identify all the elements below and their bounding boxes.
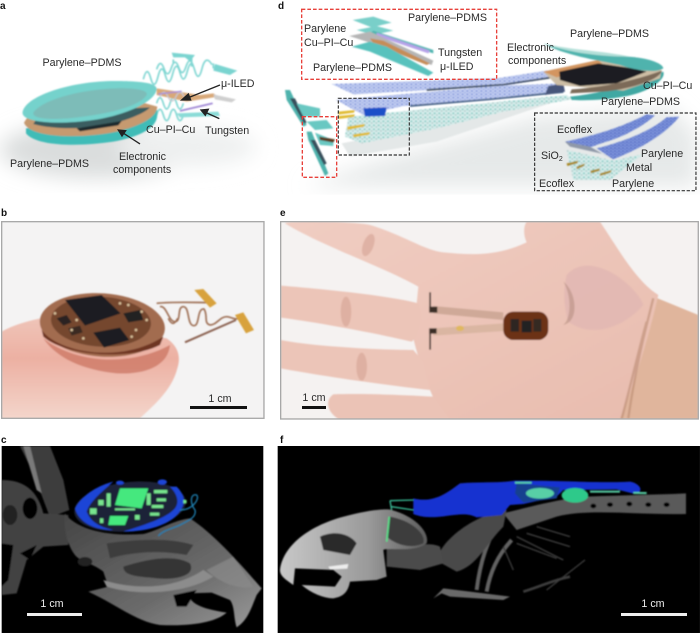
bottom teal layer [26, 110, 157, 145]
scale bar: panel c [27, 598, 82, 616]
labels: panel d: Electronic [507, 42, 555, 54]
skull [280, 509, 427, 598]
device: blue encapsulation [413, 481, 640, 517]
chips [65, 295, 121, 326]
panel d: exploded view of back device [270, 0, 700, 211]
labels: panel d: Parylene–PDMS [408, 12, 487, 24]
middle finger [281, 286, 421, 342]
neck [387, 543, 443, 570]
black dashed box: left section [338, 98, 409, 155]
panel letter a: a [0, 1, 6, 12]
background shadow [303, 107, 697, 187]
scale bar: panel f [621, 598, 687, 616]
labels: panel d: components [508, 55, 566, 67]
panel a: exploded view of head device [0, 50, 267, 203]
panel letter f: f [280, 435, 284, 446]
labels: panel d: Ecoflex [539, 178, 575, 190]
palm shading [564, 266, 643, 330]
labels: panel d [304, 12, 692, 190]
device disc [39, 292, 166, 358]
copper layer [24, 100, 157, 136]
scale bar: panel b [190, 393, 247, 409]
top teal disc [23, 81, 157, 123]
scale bar: panel c: 1 cm [40, 598, 64, 610]
left stack [285, 90, 307, 127]
panel b: photo of device on fingertip [2, 222, 264, 420]
labels: panel a: Parylene–PDMS [42, 57, 122, 69]
panel letter b: b [1, 208, 7, 219]
flexible strips [342, 97, 570, 157]
head section [570, 72, 664, 100]
labels: panel d: Parylene [304, 23, 346, 35]
ribbons [433, 306, 503, 320]
scale bar: panel f: 1 cm [641, 598, 665, 610]
labels: panel d: 2 [559, 156, 563, 163]
scale bar: panel b: 1 cm [208, 393, 232, 405]
electrodes [429, 292, 437, 350]
labels: panel d: Cu–PI–Cu [304, 37, 353, 49]
red dashed box: inset [302, 9, 497, 79]
ribs and scapula [477, 513, 512, 592]
black dashed box: detail inset [535, 113, 696, 191]
skull [65, 513, 262, 627]
labels: panel a: Tungsten [205, 125, 249, 137]
copper traces [157, 88, 218, 102]
scale bar: panel e [302, 392, 326, 409]
labels: panel d: SiO [541, 150, 559, 162]
spine [503, 493, 686, 530]
probe [185, 320, 236, 342]
scale bar: panel e: 1 cm [302, 392, 326, 404]
labels: panel a: Cu–PI–Cu [146, 124, 195, 136]
labels: panel a: components [113, 164, 171, 176]
panel letter c: c [1, 435, 7, 446]
labels: panel d: μ-ILED [440, 61, 474, 73]
device: circuit [515, 483, 560, 503]
labels: panel a: μ-ILED [221, 78, 255, 90]
foot and arm [433, 588, 510, 600]
neck vertebrae [2, 480, 68, 595]
panel e: photo of device on palm [281, 222, 698, 419]
serpentine wire [157, 302, 210, 303]
labels: panel d: Ecoflex [557, 124, 593, 136]
ring finger [281, 340, 430, 390]
panel letter e: e [280, 208, 286, 219]
tungsten probe [180, 103, 213, 111]
inset strips [565, 114, 655, 147]
panel letter d: d [278, 1, 284, 12]
arrow: to electronic components [118, 130, 140, 144]
red dashed box: left section [302, 117, 337, 177]
gold pads [194, 289, 217, 308]
device: blue encapsulation [74, 480, 186, 533]
device: probes [390, 500, 413, 510]
labels: panel d: Parylene–PDMS [570, 28, 649, 40]
palm and index finger [285, 222, 658, 419]
arrow: to μ-ILED [182, 85, 220, 100]
device: chips [115, 488, 148, 508]
labels: panel d: Parylene [641, 148, 683, 160]
labels: panel d: Tungsten [438, 47, 482, 59]
red inset stack [349, 17, 433, 76]
labels: panel d: Parylene–PDMS [601, 96, 680, 108]
labels: panel d: Parylene [612, 178, 654, 190]
labels: panel d: Cu–PI–Cu [643, 80, 692, 92]
labels: panel a: Electronic [119, 151, 167, 163]
serpentine upper layer [143, 58, 213, 121]
labels: panel d: Parylene–PDMS [313, 62, 392, 74]
little finger [328, 394, 450, 419]
labels: panel a: Parylene–PDMS [10, 158, 89, 170]
panel c: CT scan of skull with device [2, 446, 263, 633]
background shadow [0, 122, 257, 178]
labels: panel d: Metal [626, 162, 652, 174]
panel f: CT scan of body with device [278, 446, 700, 633]
shoulder blade [20, 446, 69, 517]
finger [2, 318, 179, 420]
gold LED tips [338, 110, 370, 137]
labels: panel a [10, 57, 255, 176]
wrist [620, 288, 698, 419]
arrow: to tungsten [201, 109, 219, 119]
electronic components [33, 107, 150, 128]
device [503, 312, 548, 340]
device: serpentine wire [158, 495, 197, 536]
